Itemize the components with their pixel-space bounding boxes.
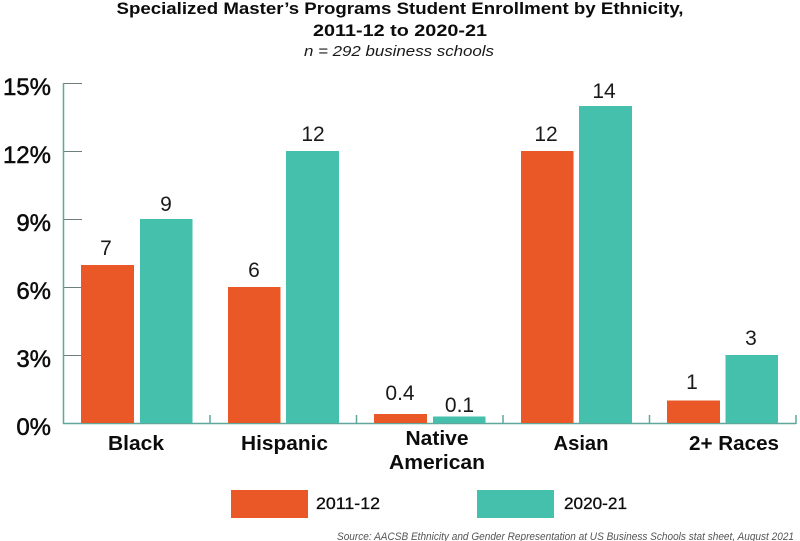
group: Hispanic: 6 (248, 259, 260, 282)
group: 2+ Races: 3 (745, 327, 757, 350)
group: Black: Black (108, 433, 165, 455)
group: Asian (521, 80, 632, 455)
group: Black: 9 (160, 193, 172, 216)
group: Black (81, 193, 192, 455)
y axis with labels: 12% (3, 142, 51, 169)
y axis with labels: 6% (16, 278, 51, 305)
group: Native American: 0.1 (445, 394, 474, 417)
group: Hispanic: 12 (301, 123, 325, 146)
legend item: 2011-12: 2011-12 (316, 495, 380, 513)
group: 2+ Races: 1 (686, 371, 698, 394)
title (116, 0, 684, 40)
group: Asian: Asian (554, 433, 608, 455)
group: 2+ Races: 2+ Races (689, 433, 779, 455)
y axis with labels: 3% (16, 346, 51, 373)
legend (231, 490, 627, 518)
group: Asian: 12 (534, 123, 558, 146)
group: Native American: 0.4 (385, 382, 415, 405)
group: Native American: American (389, 452, 485, 474)
y axis with labels (3, 74, 796, 441)
subtitle: n = 292 business schools (304, 43, 495, 60)
group: 2+ Races (667, 327, 779, 455)
legend item: 2020-21: 2020-21 (564, 495, 627, 513)
title: 2011-12 to 2020-21 (313, 21, 487, 40)
group: Black: 7 (100, 237, 112, 260)
y axis with labels: 0% (16, 414, 51, 441)
group: Native American: Native (406, 428, 468, 450)
legend item: 2020-21 (477, 490, 627, 518)
y axis with labels: 9% (16, 210, 51, 237)
group: Asian: 14 (592, 80, 616, 103)
y axis with labels: 15% (3, 74, 51, 101)
group: Native American (374, 382, 486, 474)
legend item: 2011-12 (231, 490, 380, 518)
group: Hispanic (228, 123, 339, 455)
group: Hispanic: Hispanic (241, 433, 328, 455)
